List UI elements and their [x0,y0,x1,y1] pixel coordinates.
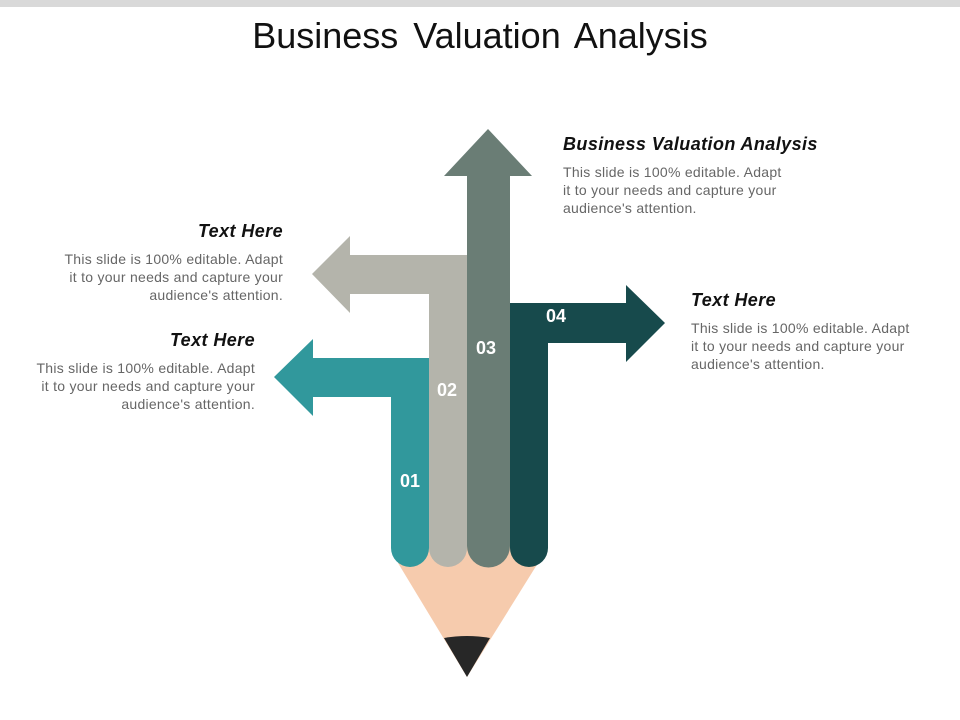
arrow 03 gray green: 03 [476,338,496,358]
text block: 01 left: it to your needs and capture your [41,378,255,394]
text block: 01 left [36,330,255,412]
text block: 01 left: This slide is 100% editable. Adapt [36,360,255,376]
text block: 04 right: This slide is 100% editable. Adapt [691,320,910,336]
text block: 04 right: Text Here [691,290,776,310]
text block: 02 left: audience's attention. [149,287,283,303]
text block: 02 left: This slide is 100% editable. Adapt [64,251,283,267]
text block: 02 left [64,221,283,303]
text block: 04 right: audience's attention. [691,356,825,372]
arrow 01 teal [274,339,429,567]
title: Business Valuation Analysis [252,15,708,56]
text block: Business Valuation Analysis: This slide is 100% editable. Adapt [563,164,782,180]
text block: 01 left: Text Here [170,330,255,350]
arrow 01 teal: 01 [400,471,420,491]
text block: Business Valuation Analysis: audience's attention. [563,200,697,216]
text block: 02 left: Text Here [198,221,283,241]
text block: 04 right [691,290,910,372]
arrow 02 light gray: 02 [437,380,457,400]
text block: Business Valuation Analysis [563,134,818,216]
arrow 03 gray green [444,129,532,568]
text block: Business Valuation Analysis: it to your needs and capture your [563,182,777,198]
pencil tip graphite [444,636,490,677]
text block: 01 left: audience's attention. [121,396,255,412]
pencil tip wood [398,540,538,677]
text block: 04 right: it to your needs and capture your [691,338,905,354]
arrow 04 dark teal: 04 [546,306,566,326]
arrow 02 light gray [312,236,467,567]
text block: Business Valuation Analysis: Business Valuation Analysis [563,134,818,154]
arrow 04 dark teal [510,285,665,567]
text block: 02 left: it to your needs and capture your [69,269,283,285]
